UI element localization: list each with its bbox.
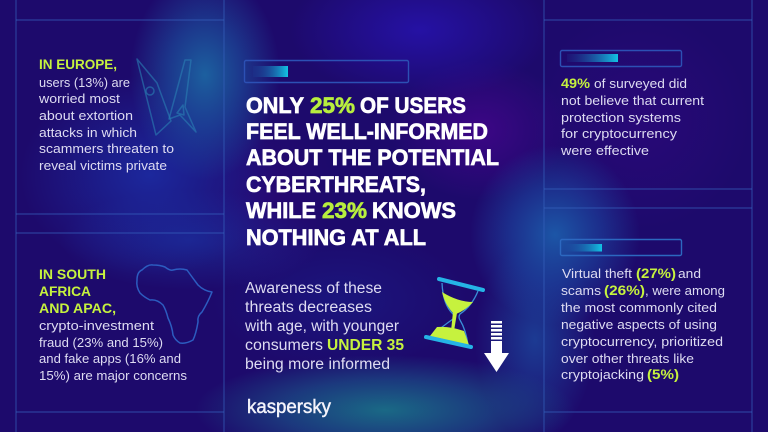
text: awareness: Awareness of these (245, 280, 382, 297)
text: awareness (244, 280, 404, 373)
text: Europe: worried most (38, 91, 120, 106)
text: virtual theft: , were among (645, 283, 725, 298)
text: South Africa and APAC: fraud (23% and 15%) (39, 335, 163, 350)
text: virtual theft: and (678, 266, 701, 281)
text: 49%: were effective (560, 143, 649, 158)
text: virtual theft: negative aspects of using (561, 317, 717, 332)
text: awareness: being more informed (245, 356, 390, 373)
text: awareness: threats decreases (245, 299, 372, 316)
text: virtual theft: the most commonly cited (561, 300, 717, 315)
text: South Africa and APAC: IN SOUTH (39, 267, 106, 282)
text: Europe: reveal victims private (39, 158, 167, 173)
text: Europe: scammers threaten to (39, 141, 174, 156)
text: South Africa and APAC: 15%) are major concerns (39, 368, 188, 383)
heading (246, 93, 499, 250)
text: 49%: not believe that current (561, 93, 704, 108)
text: South Africa and APAC: crypto-investment (39, 318, 154, 333)
icon: hourglass (426, 279, 483, 347)
progress bar: centre (244, 60, 408, 82)
text: virtual theft (561, 266, 725, 382)
text: virtual theft: (26%) (604, 283, 645, 298)
text: South Africa and APAC (39, 267, 188, 383)
text: virtual theft: Virtual theft (562, 266, 632, 281)
heading: ABOUT THE POTENTIAL (246, 145, 499, 170)
text: awareness: consumers (245, 337, 323, 354)
text: virtual theft: scams (561, 283, 602, 298)
text: 49%: of surveyed did (594, 76, 687, 91)
heading: FEEL WELL-INFORMED (246, 119, 488, 144)
progress bar: lower right (560, 240, 682, 256)
text: virtual theft: cryptocurrency, prioritized (561, 334, 723, 349)
text: virtual theft: over other threats like (561, 351, 694, 366)
text: South Africa and APAC: AND APAC, (39, 301, 116, 316)
icon: Africa outline (137, 265, 212, 343)
heading: 25% (310, 93, 355, 118)
logo: kaspersky: kaspersky (247, 397, 331, 418)
text: virtual theft: (5%) (647, 367, 679, 382)
icon: down arrow (484, 321, 509, 372)
progress bar: top right (560, 50, 682, 66)
heading: 23% (322, 198, 367, 223)
text: South Africa and APAC: and fake apps (16% and (39, 351, 181, 366)
text: Europe: IN EUROPE, (39, 57, 117, 72)
text: awareness: with age, with younger (244, 318, 399, 335)
heading: OF USERS (360, 93, 466, 118)
heading: KNOWS (372, 198, 456, 223)
text: 49% (560, 76, 704, 158)
heading: CYBERTHREATS, (246, 172, 426, 197)
icon: Big Ben and Eiffel Tower outline (137, 59, 196, 135)
heading: WHILE (246, 198, 316, 223)
text: Europe: about extortion (39, 108, 133, 123)
text: Europe: users (13%) are (39, 75, 130, 90)
text: 49%: for cryptocurrency (561, 126, 678, 141)
text: Europe (38, 57, 174, 173)
text: awareness: UNDER 35 (327, 337, 404, 354)
text: 49%: protection systems (561, 110, 682, 125)
text: Europe: attacks in which (39, 125, 137, 140)
heading: NOTHING AT ALL (246, 225, 426, 250)
text: 49%: 49% (561, 76, 590, 91)
text: South Africa and APAC: AFRICA (39, 284, 91, 299)
text: virtual theft: cryptojacking (561, 367, 644, 382)
heading: ONLY (246, 93, 304, 118)
text: virtual theft: (27%) (636, 266, 676, 281)
